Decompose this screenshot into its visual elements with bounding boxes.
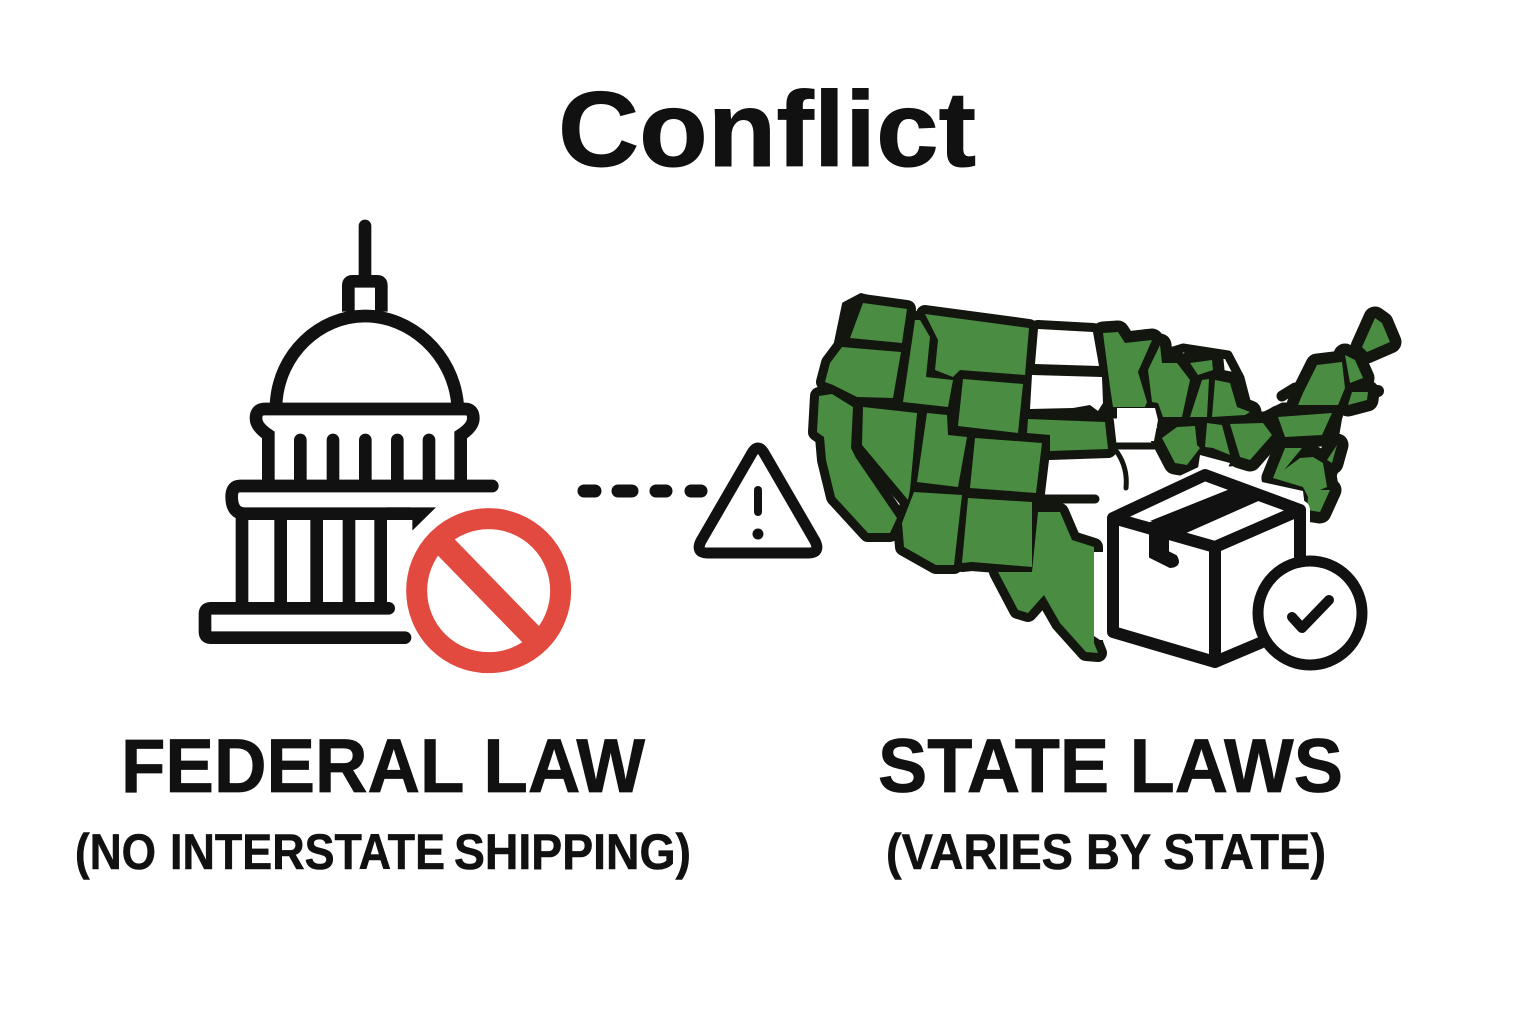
green states bbox=[817, 303, 1390, 653]
box tape bbox=[1150, 487, 1263, 534]
white cut-outs at open map edges bbox=[1094, 408, 1306, 640]
box white backing bbox=[1113, 475, 1300, 662]
capitol dome bbox=[276, 316, 458, 405]
sublabel: no interstate shipping bbox=[75, 824, 691, 880]
entablature band bbox=[232, 486, 492, 514]
sublabel: no interstate shipping: INTERSTATE bbox=[170, 824, 445, 880]
sublabel: varies by state: (VARIES BY STATE) bbox=[886, 824, 1326, 880]
icon: shipping box with check bbox=[1113, 475, 1362, 665]
label: state laws: STATE LAWS bbox=[878, 724, 1343, 809]
lower columns bbox=[242, 514, 381, 608]
icon: warning triangle bbox=[699, 448, 817, 553]
box outline bbox=[1113, 475, 1300, 662]
capitol base bbox=[205, 608, 405, 638]
capitol cornice and drum bbox=[256, 409, 473, 480]
capitol lantern bbox=[348, 281, 381, 312]
box tape tab bbox=[1150, 523, 1178, 567]
map border details bbox=[1030, 348, 1378, 499]
sublabel: no interstate shipping: SHIPPING) bbox=[454, 824, 691, 880]
dashed connector bbox=[584, 484, 701, 498]
label: federal law: FEDERAL LAW bbox=[121, 724, 645, 809]
icon: capitol building with prohibition sign bbox=[205, 226, 561, 663]
title: Conflict bbox=[558, 69, 976, 189]
entablature wedge bbox=[387, 507, 436, 531]
prohibition sign bbox=[417, 519, 561, 663]
map: United States states bbox=[817, 295, 1390, 653]
plains states without fill bbox=[1030, 329, 1103, 411]
check badge bbox=[1258, 561, 1362, 665]
sublabel: no interstate shipping: (NO bbox=[75, 824, 156, 880]
capitol spire bbox=[346, 226, 384, 278]
drum columns bbox=[300, 440, 429, 482]
map outline layer bbox=[817, 295, 1390, 653]
